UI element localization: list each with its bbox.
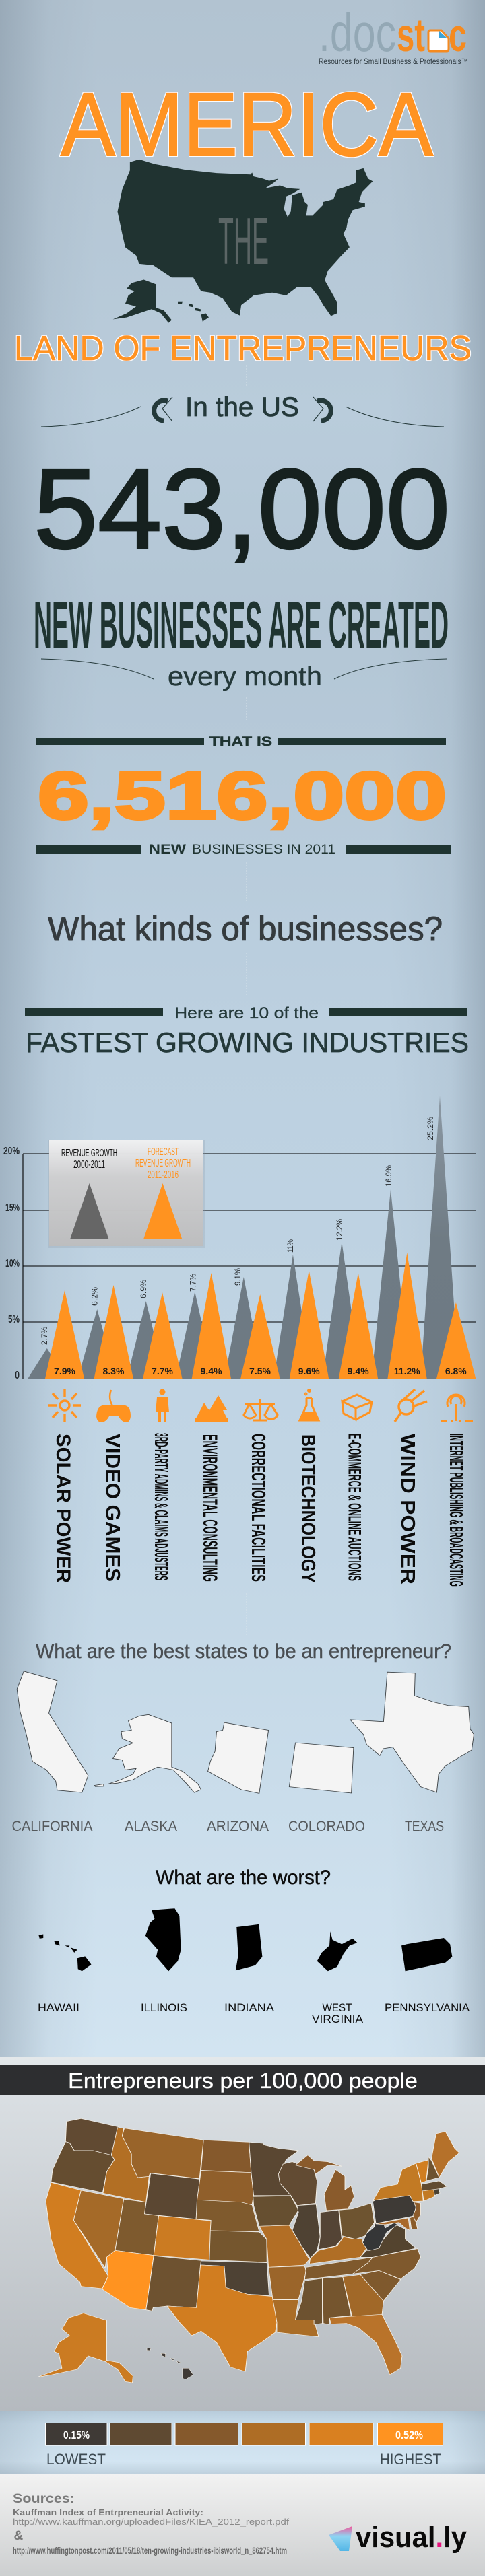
chart y-axis labels: 20% xyxy=(3,1146,20,1157)
gray triangle value labels: 6.9% xyxy=(139,1280,148,1298)
labels: industry names xyxy=(52,1433,467,1587)
map: Alaska xyxy=(94,1714,201,1792)
orange triangle value labels xyxy=(54,1366,467,1377)
chart legend: 2000-2011 xyxy=(73,1159,105,1171)
legend captions xyxy=(46,2451,441,2468)
logo wordmark xyxy=(319,3,467,63)
chart y-axis labels: 5% xyxy=(8,1314,20,1325)
chart legend: REVENUE GROWTH xyxy=(135,1158,191,1169)
icon: antenna xyxy=(441,1395,473,1421)
logo: visual.ly: visual.ly xyxy=(356,2521,467,2554)
choropleth map xyxy=(37,2118,459,2383)
labels: industry names: WIND POWER xyxy=(397,1434,418,1585)
map: Texas xyxy=(350,1672,474,1792)
heading: fastest growing industries xyxy=(25,1004,469,1058)
orange triangle value labels: 7.9% xyxy=(54,1366,76,1377)
sources: http://www.kauffman.org/uploadedFiles/KIEA_2012_report.pdf xyxy=(13,2517,289,2527)
chart legend xyxy=(48,1140,205,1248)
maps: best states xyxy=(17,1671,474,1793)
gray triangle value labels: 16.9% xyxy=(384,1165,393,1187)
orange triangle value labels: 11.2% xyxy=(394,1366,420,1377)
background xyxy=(0,0,485,2060)
icon: plug xyxy=(395,1389,427,1422)
heading: In the US: In the US xyxy=(185,392,299,422)
panel: map legend xyxy=(0,2411,485,2474)
map: Arizona xyxy=(208,1722,269,1793)
sources: Sources: xyxy=(13,2492,75,2506)
banner: new businesses in 2011: NEW xyxy=(149,843,186,857)
map: United States silhouette xyxy=(113,160,373,323)
labels: worst states: HAWAII xyxy=(38,2001,79,2014)
chart legend: REVENUE GROWTH xyxy=(61,1148,117,1159)
banner: new businesses in 2011 xyxy=(36,843,451,857)
icon: sun xyxy=(48,1389,81,1422)
gray triangle value labels: 6.2% xyxy=(90,1287,100,1306)
chart legend: FORECAST xyxy=(148,1146,179,1158)
labels: worst states: PENNSYLVANIA xyxy=(385,2001,470,2014)
banner: that is: THAT IS xyxy=(209,735,272,749)
heading: fastest growing industries: Here are 10 of the xyxy=(174,1004,319,1022)
gray triangle value labels: 25.2% xyxy=(426,1117,435,1140)
chart: revenue growth by industry xyxy=(3,1096,476,1381)
labels: worst states: VIRGINIA xyxy=(312,2013,364,2025)
labels: industry names: VIDEO GAMES xyxy=(101,1434,124,1582)
sources: & xyxy=(13,2529,23,2543)
labels: industry names: CORRECTIONAL FACILITIES xyxy=(247,1434,269,1582)
legend values: 0.15% xyxy=(63,2429,90,2441)
labels: worst states xyxy=(38,2001,470,2025)
statistic: 543,000: 543,000 xyxy=(34,446,450,572)
icon: game controller xyxy=(96,1390,131,1422)
gray triangle value labels xyxy=(40,1117,435,1345)
subheading: every month: every month xyxy=(168,662,322,691)
logo wordmark: c xyxy=(449,9,467,61)
question: what kinds of businesses: What kinds of businesses? xyxy=(48,910,443,948)
panel: entrepreneurs map xyxy=(0,2057,485,2411)
chart legend: 2011-2016 xyxy=(148,1169,179,1181)
gray triangle value labels: 11% xyxy=(286,1239,295,1253)
map: Colorado xyxy=(289,1743,354,1793)
legend values xyxy=(63,2429,423,2441)
chart y-axis labels: 0 xyxy=(15,1370,20,1381)
logo wordmark: st xyxy=(397,9,425,61)
labels: worst states: INDIANA xyxy=(224,2001,275,2014)
icon: box xyxy=(342,1395,372,1420)
labels: best states xyxy=(12,1819,444,1834)
maps: worst states xyxy=(38,1908,452,1971)
labels: industry names: BIOTECHNOLOGY xyxy=(297,1434,319,1583)
orange triangle value labels: 7.7% xyxy=(152,1366,174,1377)
labels: industry names: SOLAR POWER xyxy=(52,1434,74,1583)
icon: scales xyxy=(244,1399,278,1420)
gray triangle value labels: 2.7% xyxy=(40,1327,49,1345)
orange triangle value labels: 6.8% xyxy=(445,1366,467,1377)
orange triangle value labels: 8.3% xyxy=(103,1366,125,1377)
icon: trees xyxy=(195,1395,228,1422)
gray triangle value labels: 7.7% xyxy=(189,1274,198,1292)
legend swatches xyxy=(46,2423,443,2445)
labels: best states: ALASKA xyxy=(125,1819,177,1834)
legend values: 0.52% xyxy=(395,2429,423,2441)
question: best states: What are the best states to be an entrepreneur? xyxy=(36,1640,451,1663)
legend captions: LOWEST xyxy=(46,2451,106,2468)
chart axis and grid xyxy=(23,1154,476,1379)
labels: worst states: WEST xyxy=(322,2001,352,2014)
legend captions: HIGHEST xyxy=(380,2451,441,2468)
statistic: 6,516,000: 6,516,000 xyxy=(38,758,447,833)
banner: entrepreneurs per 100,000 people: Entrepreneurs per 100,000 people xyxy=(68,2068,418,2093)
icon: flask xyxy=(300,1389,319,1420)
title: America: AMERICA xyxy=(61,75,434,175)
banner: new businesses in 2011: BUSINESSES IN 2011 xyxy=(192,843,335,857)
title: Land of Entrepreneurs: LAND OF ENTREPRENEURS xyxy=(14,329,472,368)
chart y-axis labels: 15% xyxy=(5,1202,20,1214)
orange triangle value labels: 9.4% xyxy=(201,1366,222,1377)
text: THE xyxy=(218,204,269,278)
sources: http://www.huffingtonpost.com/2011/05/18/ten-growing-industries-ibisworld_n_862754.htm xyxy=(13,2545,287,2556)
labels: best states: COLORADO xyxy=(288,1819,365,1834)
text: 3RD-PARTY ADMINS & CLAIMS ADJUSTERS xyxy=(151,1433,172,1580)
gray triangles: revenue growth 2000-2011 xyxy=(28,1096,459,1379)
heading: In the US xyxy=(41,392,444,427)
orange triangles: forecast growth 2011-2016 xyxy=(45,1253,476,1379)
text: ENVIRONMENTAL CONSULTING xyxy=(199,1434,221,1582)
labels: best states: ARIZONA xyxy=(207,1819,269,1834)
chart y-axis labels xyxy=(3,1146,20,1381)
sources: Kauffman Index of Entrpreneurial Activity: xyxy=(13,2507,203,2517)
banner: that is xyxy=(36,735,446,749)
map: Hawaii xyxy=(38,1935,91,1971)
banner: entrepreneurs per 100,000 people xyxy=(0,2065,485,2095)
chart y-axis labels: 10% xyxy=(5,1258,20,1269)
text: E-COMMERCE & ONLINE AUCTIONS xyxy=(345,1434,365,1581)
question: worst states: What are the worst? xyxy=(156,1867,331,1889)
panel: footer xyxy=(0,2474,485,2576)
labels: worst states: ILLINOIS xyxy=(141,2001,187,2014)
sources xyxy=(13,2492,289,2556)
map: California xyxy=(17,1671,88,1792)
gray triangle value labels: 12.2% xyxy=(335,1219,344,1241)
logo: docstoc xyxy=(319,3,468,66)
map: West Virginia xyxy=(317,1931,357,1971)
labels: best states: CALIFORNIA xyxy=(12,1819,93,1834)
icons: industries xyxy=(48,1389,473,1422)
logo wordmark: .doc xyxy=(319,3,396,63)
labels: best states: TEXAS xyxy=(405,1819,444,1834)
map: Indiana xyxy=(236,1924,262,1970)
text: INTERNET PUBLISHING & BROADCASTING xyxy=(446,1434,467,1587)
orange triangle value labels: 9.6% xyxy=(298,1366,320,1377)
map: Pennsylvania xyxy=(401,1938,452,1971)
icon: person xyxy=(156,1389,169,1422)
orange triangle value labels: 7.5% xyxy=(249,1366,271,1377)
orange triangle value labels: 9.4% xyxy=(348,1366,369,1377)
heading: fastest growing industries: FASTEST GROWING INDUSTRIES xyxy=(26,1026,469,1058)
map: Illinois xyxy=(146,1908,181,1971)
subheading: every month xyxy=(41,659,447,691)
gray triangle value labels: 9.1% xyxy=(233,1268,243,1286)
